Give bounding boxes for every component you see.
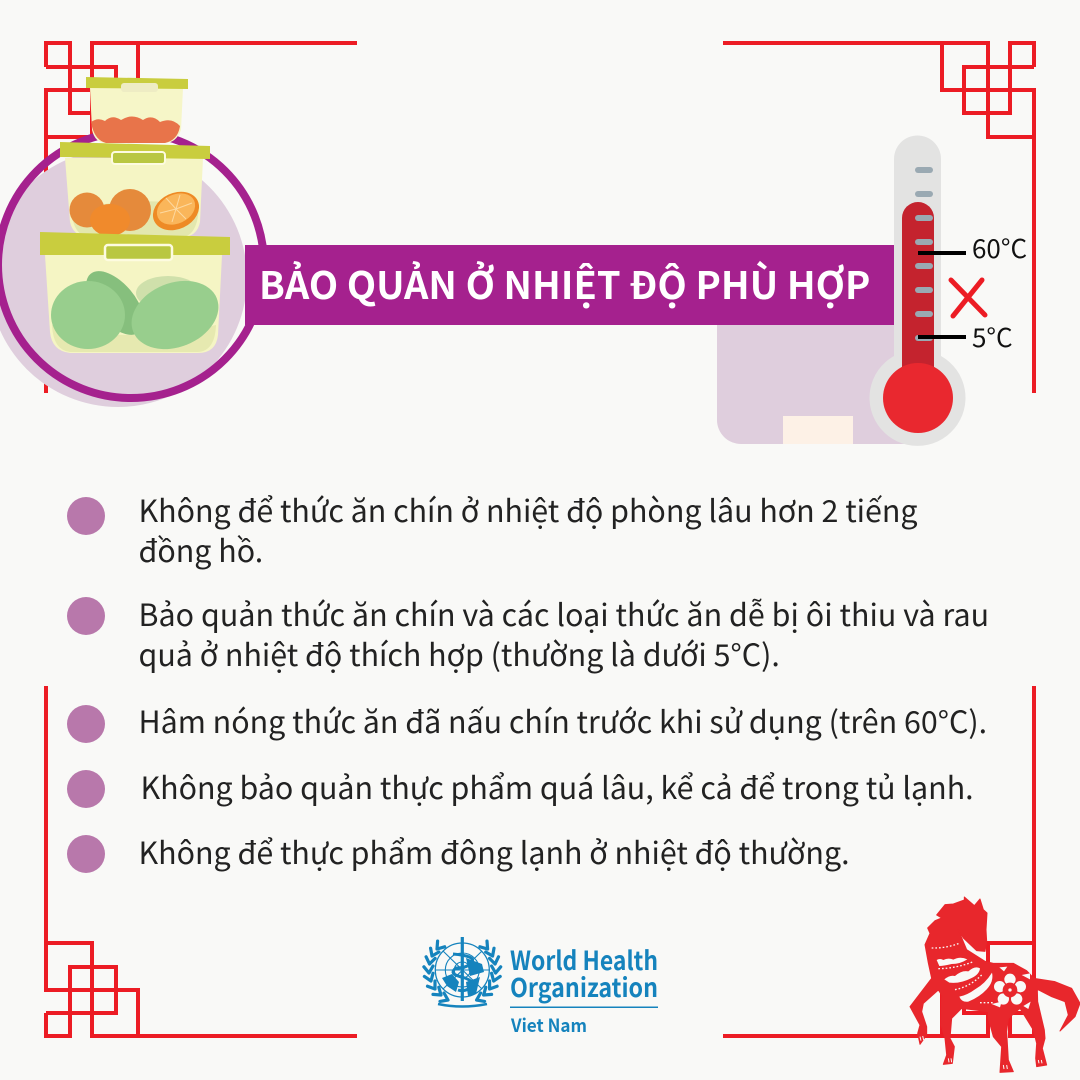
text 1 (138, 487, 918, 571)
horse papercut (910, 896, 1080, 1073)
WHO logo (422, 937, 658, 1038)
food containers illustration (0, 77, 266, 407)
small box (90, 88, 183, 143)
medium box (65, 158, 203, 237)
text 5: Không để thực phẩm đông lạnh ở nhiệt độ thường. (138, 829, 850, 873)
text 2 (138, 591, 989, 675)
bullet 3 (67, 705, 105, 743)
text 3: Hâm nóng thức ăn đã nấu chín trước khi sử dụng (trên 60°C). (138, 698, 987, 742)
thermometer (870, 136, 988, 446)
bullet 4 (67, 770, 105, 808)
text 2: quả ở nhiệt độ thích hợp (thường là dưới 5°C). (138, 631, 780, 675)
title banner (245, 245, 894, 325)
lavender block behind thermometer (717, 325, 917, 444)
text 1: Không để thức ăn chín ở nhiệt độ phòng lâu hơn 2 tiếng (138, 487, 918, 531)
label: 5°C: 5°C (972, 318, 1013, 355)
text 1: đồng hồ. (138, 527, 263, 571)
label: 60°C: 60°C (972, 229, 1027, 266)
title: BẢO QUẢN Ở NHIỆT ĐỘ PHÙ HỢP (259, 255, 870, 310)
text 4: Không bảo quản thực phẩm quá lâu, kể cả để trong tủ lạnh. (140, 764, 974, 808)
WHO logo: Viet Nam (510, 1012, 587, 1038)
bullet 2 (67, 597, 105, 635)
bullet 5 (67, 835, 105, 873)
large box (45, 255, 222, 353)
text 2: Bảo quản thức ăn chín và các loại thức ăn dễ bị ôi thiu và rau (138, 591, 989, 635)
bullet 1 (67, 497, 105, 535)
